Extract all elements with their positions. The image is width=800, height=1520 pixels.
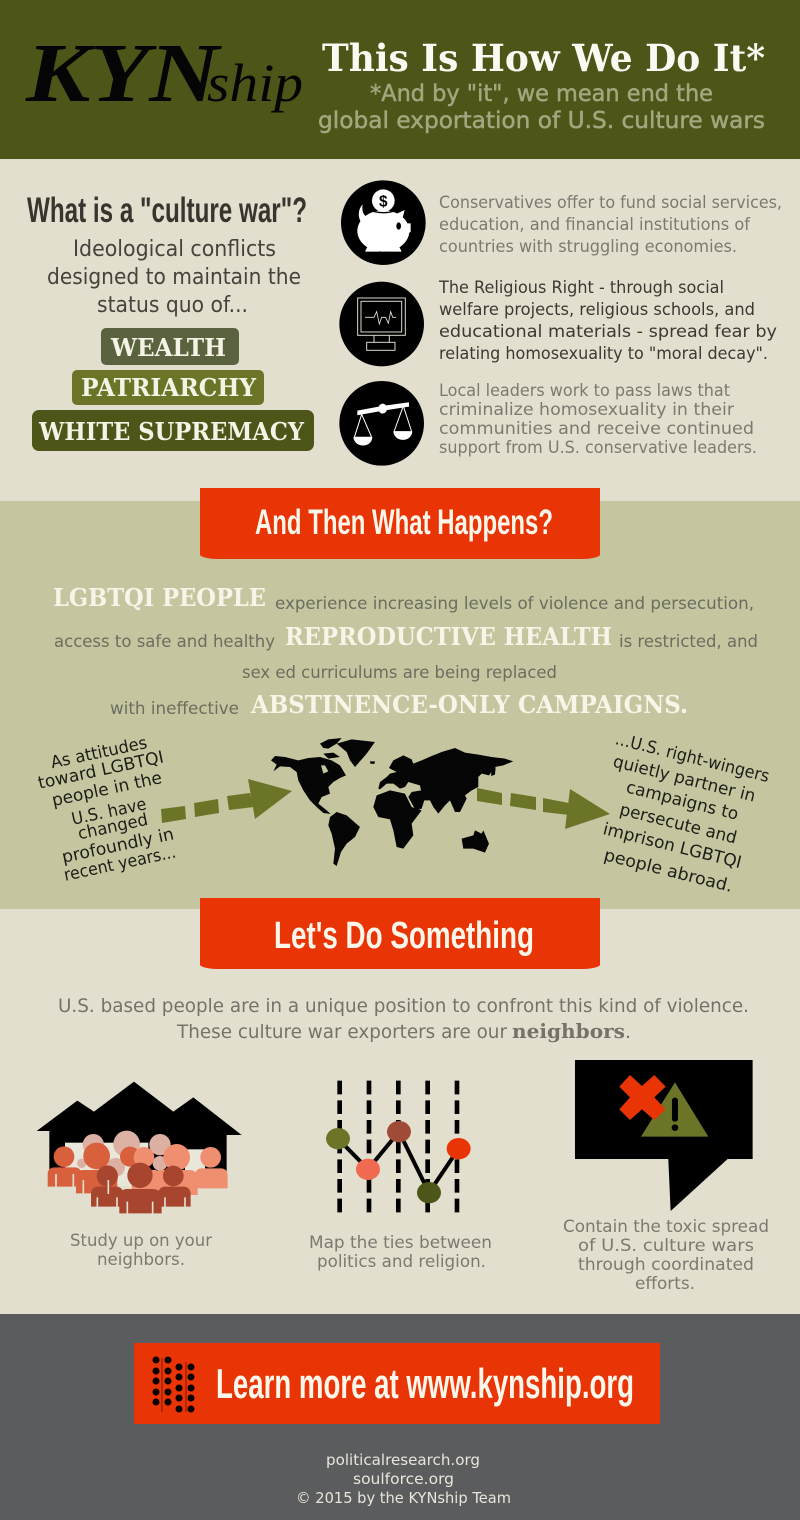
arrow: out of map	[477, 788, 610, 829]
text: right-wingers: campaigns to	[624, 778, 740, 825]
panel: let's do something	[0, 898, 800, 1314]
credits	[296, 1451, 511, 1507]
logo: ship	[207, 53, 303, 113]
text: right-wingers: persecute and	[618, 800, 739, 848]
text: consequences: experience increasing levels of violence and persecution,	[275, 594, 754, 614]
caption: contain: through coordinated	[578, 1255, 754, 1275]
label: white supremacy: WHITE SUPREMACY	[38, 417, 305, 446]
icon: monitor with heartbeat	[339, 282, 424, 366]
text: conservatives fund: countries with struggling economies.	[439, 237, 737, 257]
text: conservatives fund	[439, 193, 782, 257]
text: unique position	[58, 995, 749, 1043]
caption: contain	[563, 1217, 769, 1294]
arrow: into map	[161, 779, 292, 823]
text: religious right: The Religious Right - through social	[438, 278, 724, 298]
text: right-wingers	[601, 729, 771, 897]
caption: study up: neighbors.	[97, 1250, 185, 1270]
text: local leaders: Local leaders work to pass laws that	[439, 381, 730, 401]
text: conservatives fund: Conservatives offer to fund social services,	[439, 193, 782, 213]
definition text: designed to maintain the	[47, 265, 301, 290]
icon: speech bubble warning	[575, 1060, 753, 1211]
caption: map the ties	[309, 1233, 492, 1272]
caption: contain: Contain the toxic spread	[563, 1217, 769, 1237]
icon: scales	[339, 381, 424, 466]
text: consequences: ABSTINENCE-ONLY CAMPAIGNS.	[250, 690, 688, 719]
title: This Is How We Do It*	[322, 36, 765, 80]
text: attitudes: As attitudes	[49, 733, 149, 773]
text: consequences: with ineffective	[110, 699, 239, 719]
banner: and then what happens	[200, 488, 600, 559]
text: local leaders	[439, 381, 757, 458]
text: religious right: welfare projects, religious schools, and	[439, 300, 755, 320]
panel: and then what happens	[0, 488, 800, 909]
label: wealth	[101, 328, 239, 365]
text: local leaders: support from U.S. conservative leaders.	[439, 438, 757, 458]
banner: let's do something: Let's Do Something	[274, 915, 534, 957]
subtitle	[318, 81, 765, 134]
text: consequences: access to safe and healthy	[54, 632, 275, 652]
text: attitudes: profoundly in	[60, 824, 176, 868]
text: unique position: .	[625, 1021, 631, 1043]
text: right-wingers: people abroad.	[602, 845, 735, 897]
icon: dots	[152, 1356, 194, 1412]
text: right-wingers: imprison LGBTQI	[601, 819, 744, 873]
text: attitudes: toward LGBTQI	[36, 748, 166, 794]
logo	[25, 27, 303, 120]
button: learn more	[134, 1343, 660, 1424]
text: right-wingers: quietly partner in	[611, 752, 757, 807]
text: consequences: sex ed curriculums are being replaced	[242, 663, 557, 683]
credits: politicalresearch.org	[326, 1451, 480, 1469]
definition text	[47, 237, 301, 318]
subtitle: *And by "it", we mean end the	[370, 81, 713, 107]
label: wealth: WEALTH	[110, 333, 226, 362]
credits: © 2015 by the KYNship Team	[296, 1489, 511, 1507]
text: unique position: These culture war exporters are our	[176, 1021, 507, 1043]
caption: contain: of U.S. culture wars	[578, 1236, 754, 1256]
world map	[271, 738, 513, 866]
text: consequences: REPRODUCTIVE HEALTH	[285, 622, 612, 651]
text: attitudes: recent years...	[62, 842, 178, 886]
text: consequences: is restricted, and	[619, 632, 758, 652]
caption: map the ties: politics and religion.	[317, 1252, 486, 1272]
credits: soulforce.org	[353, 1470, 454, 1488]
banner: and then what happens: And Then What Happens?	[255, 503, 553, 542]
heading: what is a culture war: What is a "culture war"?	[27, 191, 307, 230]
caption: study up	[70, 1231, 212, 1270]
label: patriarchy: PATRIARCHY	[81, 373, 257, 402]
definition text: status quo of...	[97, 293, 248, 318]
caption: study up: Study up on your	[70, 1231, 212, 1251]
label: white supremacy	[32, 410, 314, 451]
icon: network chart	[326, 1081, 471, 1213]
panel: what is a culture war	[0, 159, 800, 501]
logo: KYN	[25, 27, 223, 120]
text: religious right: relating homosexuality to "moral decay".	[439, 344, 768, 364]
text: religious right: educational materials - spread fear by	[439, 322, 777, 342]
text: local leaders: criminalize homosexuality in their	[439, 400, 734, 420]
icon: neighbors	[37, 1082, 242, 1214]
text: attitudes: U.S. have	[70, 794, 148, 830]
text: local leaders: communities and receive continued	[439, 419, 754, 439]
caption: contain: efforts.	[635, 1274, 695, 1294]
icon: piggy bank: $	[379, 194, 388, 211]
caption: map the ties: Map the ties between	[309, 1233, 492, 1253]
banner: let's do something	[200, 898, 600, 969]
text: unique position: U.S. based people are in a unique position to confront this kind of violence.	[58, 995, 749, 1017]
text: attitudes	[36, 733, 178, 886]
text: unique position: neighbors	[512, 1019, 625, 1043]
panel: footer	[0, 1314, 800, 1520]
subtitle: global exportation of U.S. culture wars	[318, 108, 765, 134]
text: consequences: LGBTQI PEOPLE	[53, 583, 266, 612]
text: consequences	[53, 583, 758, 719]
text: religious right	[438, 278, 777, 364]
text: attitudes: changed	[76, 810, 150, 844]
text: right-wingers: ...U.S. right-wingers	[613, 729, 771, 787]
text: attitudes: people in the	[50, 768, 164, 811]
definition text: Ideological conflicts	[73, 237, 276, 262]
panel: header	[0, 0, 800, 159]
icon: piggy bank	[341, 180, 426, 265]
text: conservatives fund: education, and financial institutions of	[439, 215, 751, 235]
